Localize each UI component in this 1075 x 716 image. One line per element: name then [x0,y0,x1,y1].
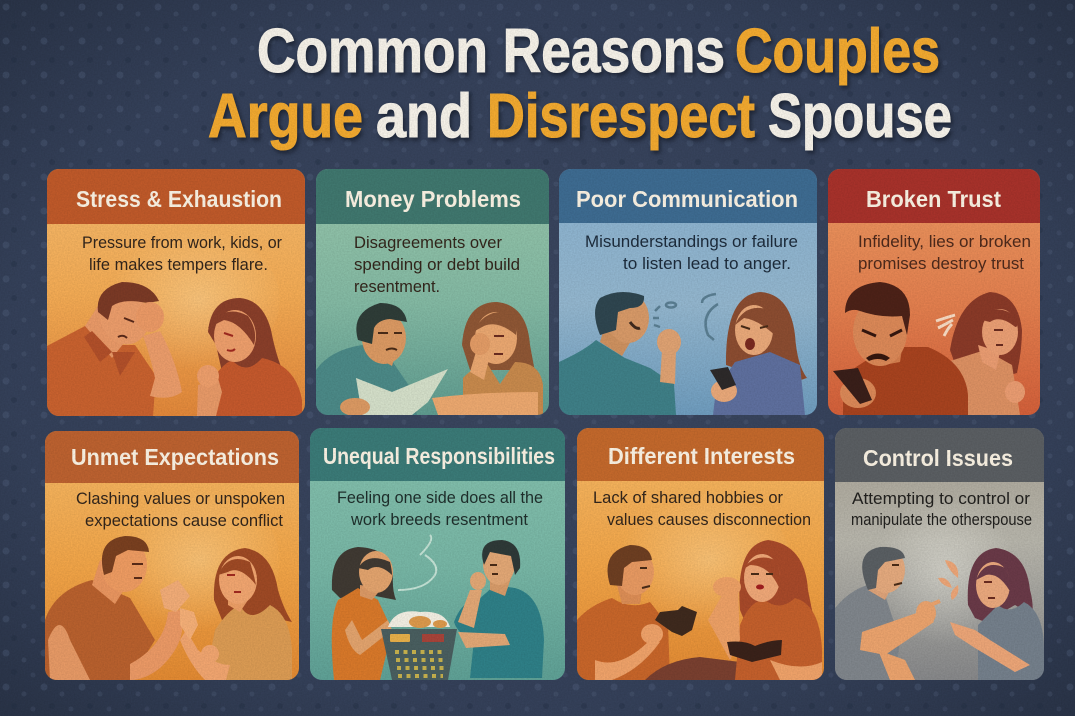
woman raising hands [950,548,1044,680]
panel: control issues [835,428,1044,680]
woman carrying laundry [332,547,396,680]
heading: Stress & Exhaustion [76,186,282,212]
man holding head [47,282,182,416]
description: life makes tempers flare. [89,256,268,274]
panel: different interests [577,428,824,680]
description: work breeds resentment [350,511,528,529]
man gesturing [559,292,681,415]
heading: Unequal Responsibilities [323,443,555,469]
heading: Money Problems [345,186,521,212]
man with phone [833,282,968,415]
man with tablet [577,545,697,680]
panel: poor communication [559,169,817,415]
man reading bill [316,303,417,416]
heading: Poor Communication [576,186,798,212]
laundry basket [381,611,457,680]
description: Attempting to control or [852,490,1031,508]
panel: unmet expectations [45,431,299,680]
title: Spouse [768,82,952,151]
paper bill [356,369,448,415]
floating shards [938,560,958,600]
woman turned away [947,292,1025,415]
title: Argue [208,82,363,151]
man arguing [45,536,190,680]
woman turned away [180,548,292,680]
heading: Broken Trust [866,186,1001,212]
description: Misunderstandings or failure [585,233,798,251]
description: Infidelity, lies or broken [858,233,1031,251]
panel: stress and exhaustion [47,169,305,416]
description: values causes disconnection [607,511,811,529]
description: expectations cause conflict [85,512,283,530]
man thinking [454,540,544,678]
description: manipulate the otherspouse [851,511,1032,529]
steam lines [398,535,436,590]
panel: broken trust [828,169,1040,415]
hand on bill [340,398,370,416]
woman holding forehead [432,302,543,415]
crossed legs [645,657,740,680]
woman with phone [710,292,807,415]
man pointing [835,547,940,680]
title: Common Reasons [257,17,725,86]
heading: Unmet Expectations [71,444,279,470]
panel: unequal responsibilities [310,428,565,680]
description: to listen lead to anger. [623,255,791,273]
title: and [376,82,472,151]
description: spending or debt build [354,256,520,274]
description: Lack of shared hobbies or [593,489,784,507]
heading: Different Interests [608,443,795,469]
description: Pressure from work, kids, or [82,234,282,252]
panel: money problems [316,169,549,416]
woman with book [708,540,822,680]
description: resentment. [354,278,440,296]
streak marks [936,315,955,336]
description: Feeling one side does all the [337,489,543,507]
description: promises destroy trust [858,255,1024,273]
woman looking down [197,298,302,416]
title: Couples [735,17,940,86]
speech scribbles [653,294,718,340]
title [208,17,952,151]
heading: Control Issues [863,445,1013,471]
description: Disagreements over [354,234,502,252]
description: Clashing values or unspoken [76,490,285,508]
title: Disrespect [487,82,755,151]
